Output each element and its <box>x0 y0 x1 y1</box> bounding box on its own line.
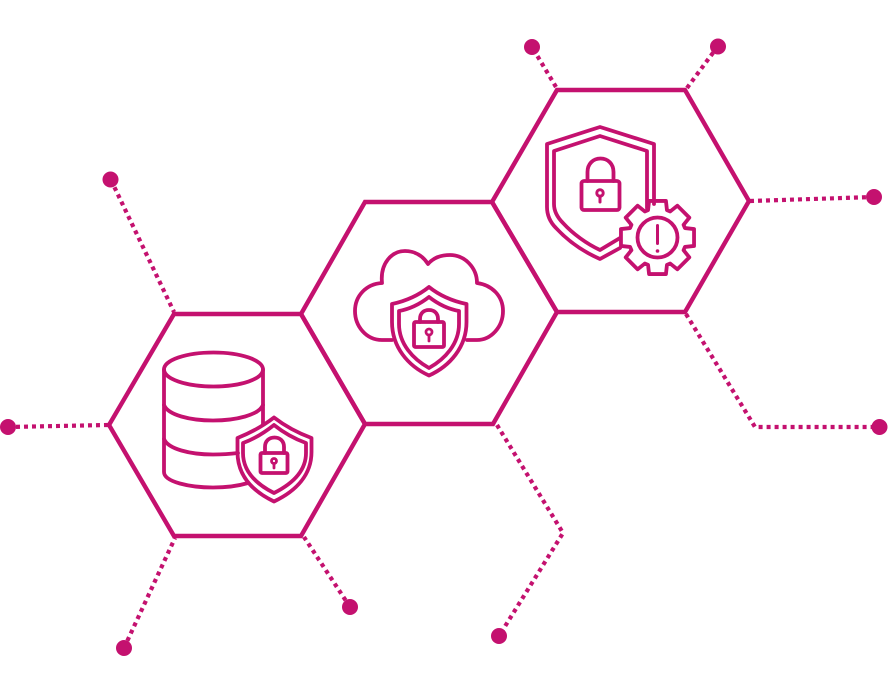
hexagon: cloud <box>301 202 557 424</box>
icon: shield with gear alert <box>547 127 694 274</box>
connector: lower right of database hexagon <box>304 537 358 615</box>
padlock <box>582 158 620 210</box>
database cylinder <box>164 352 263 488</box>
connector: below cloud hexagon <box>491 425 563 644</box>
hexagon: database <box>109 314 365 536</box>
connector: lower left of database hexagon <box>116 538 175 656</box>
connector: left of database hexagon <box>0 419 108 435</box>
shield outlines <box>547 127 654 259</box>
hexagon: shield and gear <box>492 90 749 312</box>
connector: right of shield hexagon <box>750 189 882 205</box>
icon: cloud with shield <box>355 251 503 376</box>
gear with exclamation mark <box>621 201 694 274</box>
icon: database with shield <box>164 352 312 502</box>
shield with padlock <box>238 418 312 502</box>
connector: upper left of database hexagon <box>102 172 174 312</box>
connector: upper left of shield hexagon <box>524 39 556 87</box>
cloud outline <box>355 251 503 340</box>
connector: lower right of shield hexagon <box>686 314 888 435</box>
shield with padlock <box>392 287 466 376</box>
hexagons <box>109 90 749 536</box>
connector: upper right of shield hexagon <box>687 38 726 88</box>
